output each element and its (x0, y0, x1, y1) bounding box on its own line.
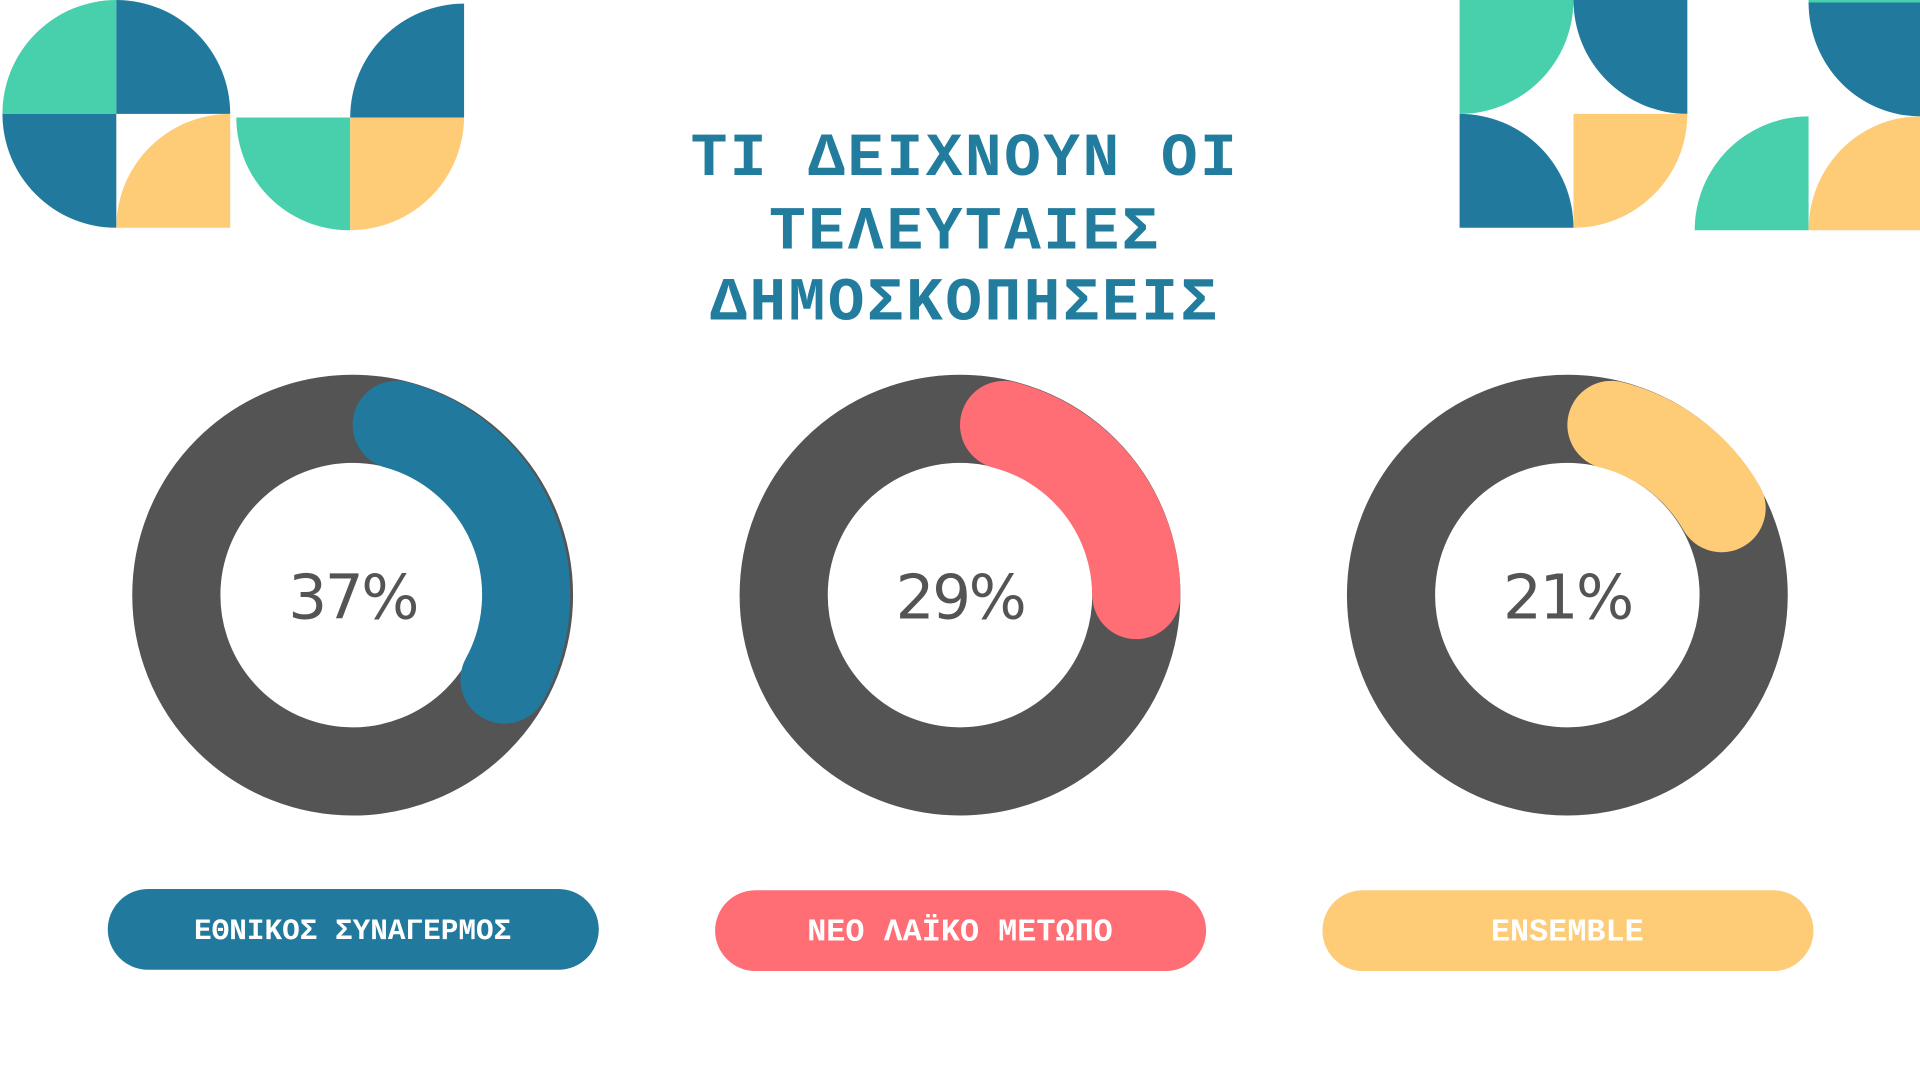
donut chart: 37% (176, 419, 529, 771)
label: Εθνικός Συναγερμός: ΕΘΝΙΚΟΣ ΣΥΝΑΓΕΡΜΟΣ (194, 915, 511, 948)
decoration: top-right tiles (1460, 0, 1920, 230)
label: Νέο Λαϊκό Μέτωπο: ΝΕΟ ΛΑΪΚΟ ΜΕΤΩΠΟ (807, 913, 1113, 950)
label: Ensemble (1322, 890, 1813, 971)
donut chart: 29% (784, 419, 1136, 771)
donut chart: 37%: 37% (288, 562, 417, 633)
title: ΤΙ ΔΕΙΧΝΟΥΝ ΟΙ (691, 125, 1239, 194)
decoration: top-left tiles (2, 0, 464, 230)
label: Εθνικός Συναγερμός (108, 889, 599, 970)
label: Νέο Λαϊκό Μέτωπο (715, 890, 1206, 971)
title: ΤΕΛΕΥΤΑΙΕΣ (769, 199, 1161, 268)
title (691, 125, 1239, 339)
donut chart: 29%: 29% (896, 562, 1024, 633)
title: ΔΗΜΟΣΚΟΠΗΣΕΙΣ (710, 270, 1220, 339)
label: Ensemble: ENSEMBLE (1491, 914, 1644, 950)
donut chart: 21%: 21% (1503, 562, 1632, 633)
donut chart: 21% (1391, 419, 1744, 771)
